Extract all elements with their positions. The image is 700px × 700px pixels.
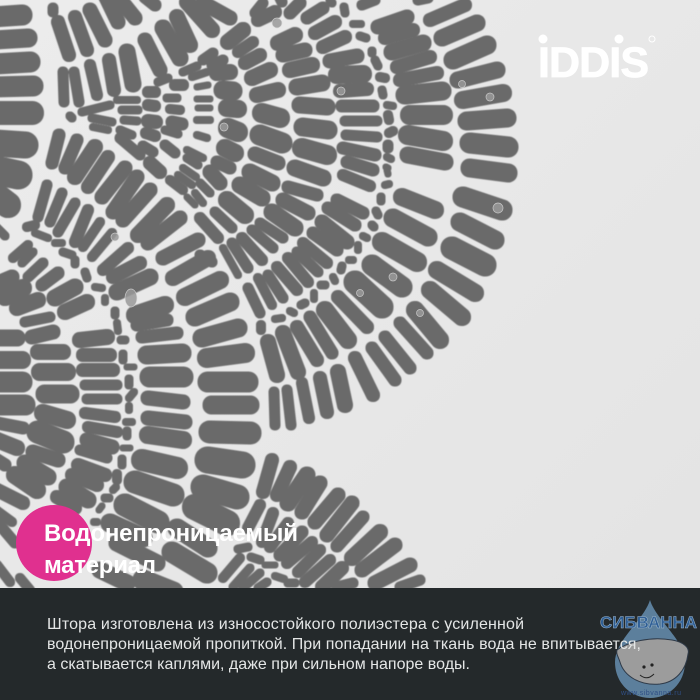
body text: а скатывается каплями, даже при сильном напоре воды. bbox=[47, 656, 470, 673]
heading badge: pink circle bbox=[16, 505, 92, 581]
heading: материал bbox=[44, 552, 156, 579]
logo: IDDIS: IDDIS bbox=[538, 39, 649, 87]
body text bbox=[47, 616, 641, 673]
bottom panel bbox=[0, 588, 700, 700]
heading: Водонепроницаемый bbox=[44, 520, 298, 547]
pattern: grey petal rosettes bbox=[0, 0, 508, 592]
watermark: Sibvanna drop with bathtub: www.sibvanna.ru bbox=[620, 690, 681, 697]
heading bbox=[44, 520, 298, 579]
water droplets on the fabric bbox=[111, 18, 503, 316]
watermark: Sibvanna drop with bathtub bbox=[600, 600, 697, 698]
body text: Штора изготовлена из износостойкого полиэстера с усиленной bbox=[47, 616, 524, 633]
body text: водонепроницаемой пропиткой. При попадании на ткань вода не впитывается, bbox=[47, 636, 641, 653]
watermark: Sibvanna drop with bathtub: СИБВАННА bbox=[600, 614, 697, 632]
